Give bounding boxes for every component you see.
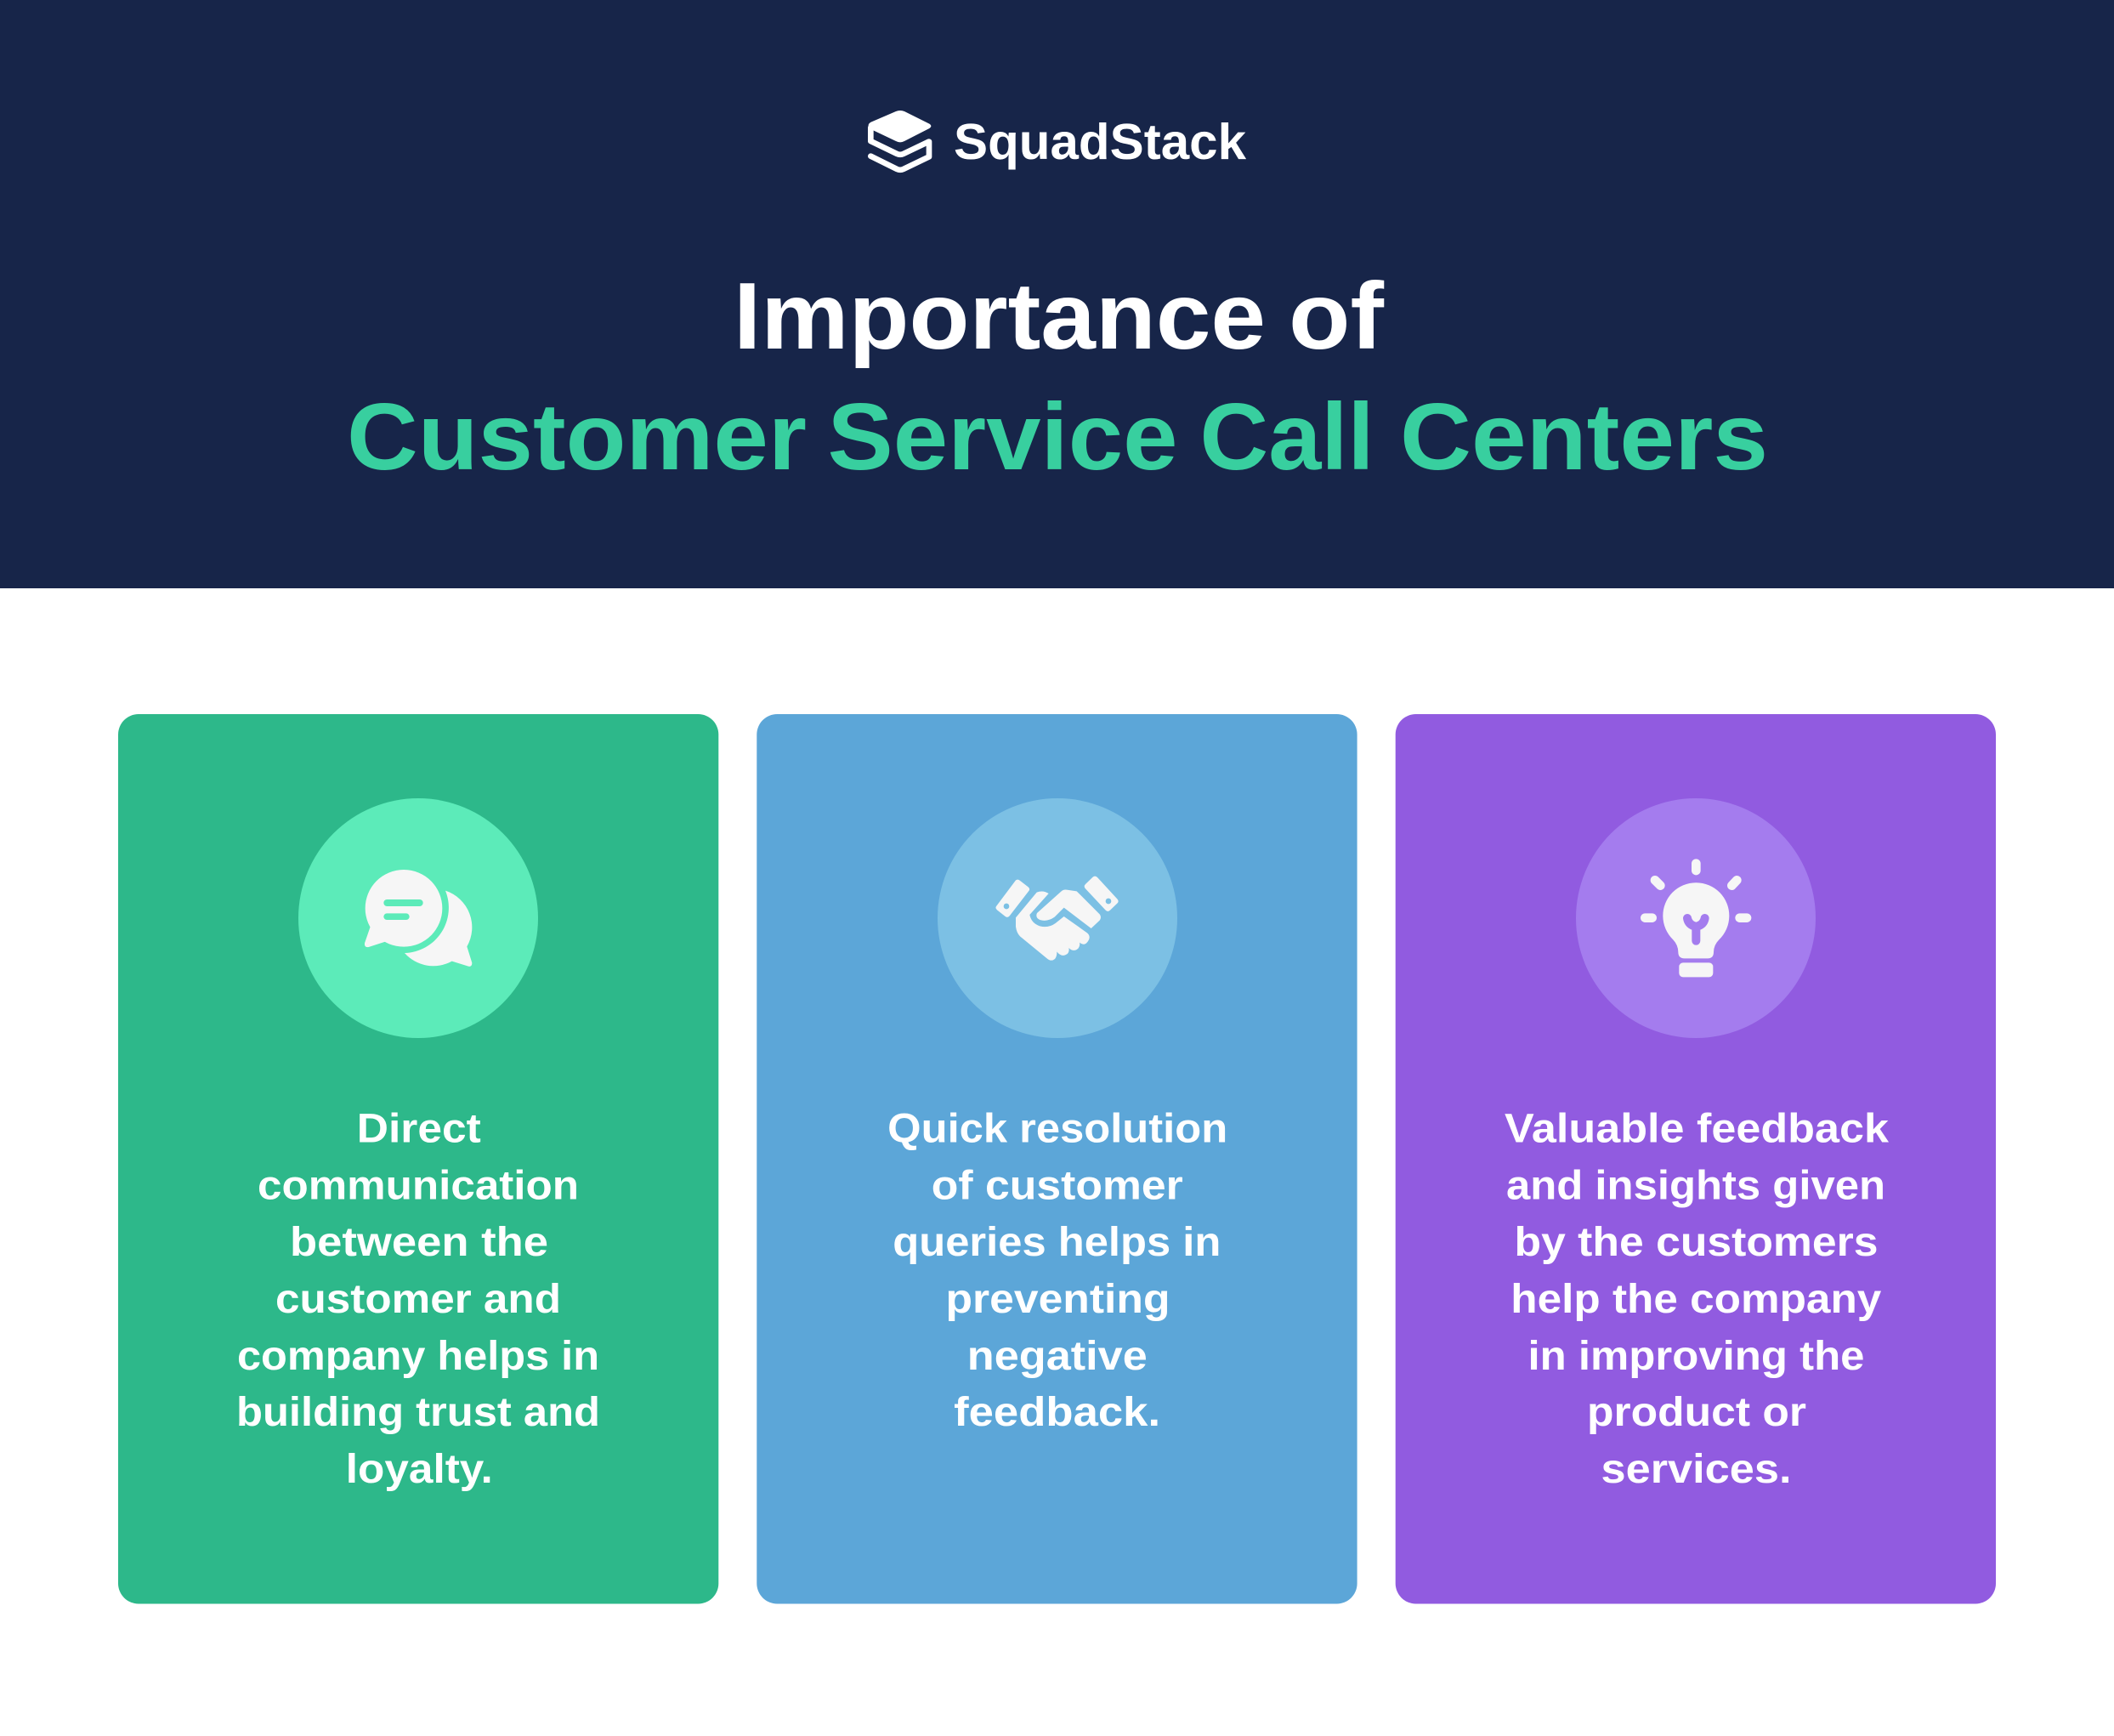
logo: SquadStack	[869, 111, 1246, 170]
card text: direct communication	[236, 1107, 600, 1492]
icon: handshake	[995, 877, 1119, 961]
icon circle: light bulb	[1576, 798, 1816, 1038]
card text: valuable feedback: Valuable feedback	[1505, 1107, 1889, 1151]
card text: direct communication: loyalty.	[346, 1447, 493, 1492]
card text: valuable feedback: in improving the	[1528, 1334, 1865, 1379]
card text: valuable feedback: help the company	[1510, 1277, 1882, 1322]
icon: light bulb	[1641, 859, 1751, 977]
panel: quick resolution	[757, 714, 1357, 1603]
title line 2	[347, 384, 1768, 490]
card text: valuable feedback: and insights given	[1506, 1163, 1885, 1209]
icon circle: handshake	[938, 798, 1177, 1038]
title line 2: Centers	[1400, 384, 1768, 490]
card text: quick resolution: preventing	[945, 1277, 1170, 1322]
title line 2: Customer	[347, 384, 807, 490]
panel: valuable feedback	[1396, 714, 1996, 1603]
card text: valuable feedback	[1505, 1107, 1889, 1492]
card text: direct communication: Direct	[357, 1107, 481, 1151]
card text: direct communication: building trust and	[236, 1390, 600, 1435]
panel: direct communication	[118, 714, 718, 1603]
card text: quick resolution: Quick resolution	[887, 1107, 1227, 1151]
card text: quick resolution: queries helps in	[893, 1220, 1221, 1265]
icon: chat bubbles	[365, 870, 472, 967]
card text: quick resolution: negative	[967, 1334, 1148, 1379]
card text: direct communication: communication	[258, 1163, 579, 1209]
header panel	[0, 0, 2114, 588]
card text: valuable feedback: product or	[1587, 1390, 1806, 1435]
card text: direct communication: between the	[290, 1220, 548, 1265]
logo wordmark: SquadStack	[954, 114, 1246, 170]
card text: quick resolution: feedback.	[954, 1390, 1160, 1435]
title line 2: Service	[828, 384, 1178, 490]
icon circle: chat bubbles	[298, 798, 538, 1038]
card text: quick resolution	[887, 1107, 1227, 1435]
title line 1: of	[1289, 264, 1385, 369]
card text: quick resolution: of customer	[932, 1163, 1183, 1209]
icon: stacked layers	[869, 111, 931, 170]
title line 1: Importance	[734, 264, 1266, 369]
card text: valuable feedback: services.	[1601, 1447, 1792, 1492]
card text: direct communication: customer and	[275, 1277, 561, 1322]
card text: valuable feedback: by the customers	[1515, 1220, 1879, 1265]
title line 2: Call	[1200, 384, 1374, 490]
card text: direct communication: company helps in	[237, 1334, 599, 1379]
